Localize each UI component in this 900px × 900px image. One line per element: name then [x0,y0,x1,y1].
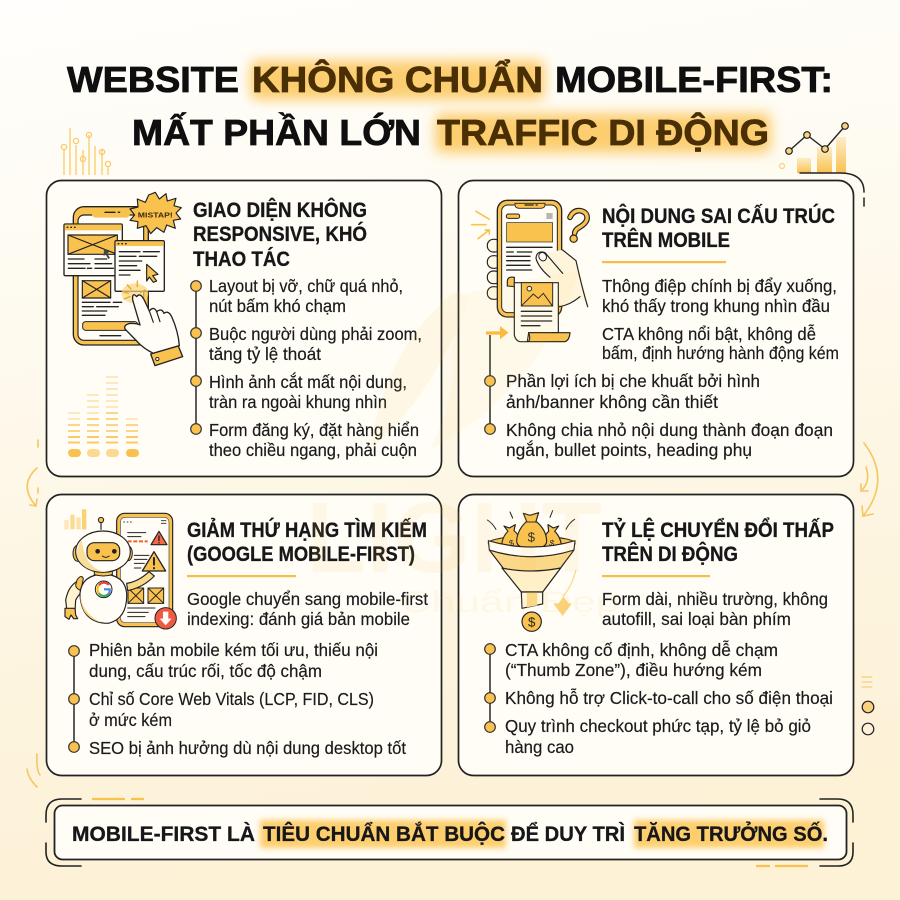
heading: conversion rate [602,518,834,577]
icon: phone with scrolling page [472,200,588,342]
intro text: Form dài, nhiều trường, không [602,589,828,609]
bullet list: CTA không cố định, không dễ chạm [505,639,778,660]
panel: conversion rate [458,494,854,776]
intro text [602,276,839,363]
bullet list: hàng cao [505,737,574,757]
bullet list: ngắn, bullet points, heading phụ [506,439,752,460]
bullet list: nút bấm khó chạm [209,296,346,316]
intro text: Google chuyển sang mobile-first [187,589,428,609]
watermark: LIGHT [306,482,602,594]
bullet list: Hình ảnh cắt mất nội dung, [209,371,407,392]
title: MOBILE-FIRST: [555,59,833,100]
title: WEBSITE [67,59,239,100]
bullet list: tăng tỷ lệ thoát [209,344,321,364]
intro text: autofill, sai loại bàn phím [602,609,791,629]
bullet list [506,371,833,460]
bullet list [209,276,422,460]
intro text: khó thấy trong khung nhìn đầu [602,296,830,316]
icon: money funnel: $ [528,529,536,544]
decoration: top-right rising chart [780,123,864,206]
bullet list [505,639,833,757]
bullet list: Không hỗ trợ Click-to-call cho số điện thoại [505,687,833,708]
bullet list: (“Thumb Zone”), điều hướng kém [505,660,762,680]
conclusion banner: TĂNG TRƯỞNG SỐ. [634,822,828,846]
watermark [306,270,620,619]
intro text: Thông điệp chính bị đẩy xuống, [602,276,837,296]
title: MẤT PHẦN LỚN [132,111,421,153]
timeline bullets [485,335,495,434]
icon: robot with phone [64,509,176,629]
decoration: top-left data lines [61,128,111,175]
heading: responsive: THAO TÁC [193,248,290,271]
intro text: bấm, định hướng hành động kém [602,343,839,363]
panel: search ranking [46,494,442,776]
bullet list: tràn ra ngoài khung nhìn [209,392,387,412]
bullet list [89,640,406,758]
panel: content structure [458,180,854,476]
title [67,58,833,153]
heading: conversion rate: TRÊN DI ĐỘNG [602,542,738,566]
heading: responsive: GIAO DIỆN KHÔNG [193,198,367,222]
bullet list: Phiên bản mobile kém tối ưu, thiếu nội [89,640,378,660]
title: KHÔNG CHUẨN [252,58,543,100]
icon: equalizer bars [68,376,139,457]
bullet list: Form đăng ký, đặt hàng hiển [209,420,419,440]
bullet list: ảnh/banner không cần thiết [506,392,718,412]
heading: content structure: TRÊN MOBILE [602,228,730,252]
icon: phone with broken layout and tapping hand: MISTAP! [138,210,173,219]
heading: search ranking [187,518,427,577]
title: TRAFFIC DI ĐỘNG [437,111,769,153]
icon: money funnel [487,511,576,631]
intro text [602,589,828,629]
conclusion banner: MOBILE-FIRST LÀ [72,823,255,846]
heading: conversion rate: TỶ LỆ CHUYỂN ĐỔI THẤP [602,518,834,542]
heading: content structure [602,204,835,263]
conclusion banner: ĐỂ DUY TRÌ [511,823,625,846]
heading: content structure: NỘI DUNG SAI CẤU TRÚC [602,204,835,228]
panel: responsive interface [46,180,442,476]
decoration: side arrows and dots [27,440,878,787]
bullet list: Layout bị vỡ, chữ quá nhỏ, [209,276,403,296]
bullet list: SEO bị ảnh hưởng dù nội dung desktop tốt [89,738,406,758]
watermark: Chuẩn Đẹp [400,586,620,619]
icon: phone with broken layout and tapping hand [64,192,183,366]
bullet list: ở mức kém [89,710,172,730]
bullet list: Không chia nhỏ nội dung thành đoạn đoạn [506,420,833,440]
bullet list: theo chiều ngang, phải cuộn [209,440,417,460]
bullet list: Chỉ số Core Web Vitals (LCP, FID, CLS) [89,689,374,709]
heading: search ranking: GIẢM THỨ HẠNG TÌM KIẾM [187,518,427,542]
icon: money funnel: $ [549,538,555,548]
icon: money funnel: $ [528,615,536,630]
heading: responsive: RESPONSIVE, KHÓ [193,222,367,246]
bullet list: Quy trình checkout phức tạp, tỷ lệ bỏ giỏ [505,716,811,736]
heading: responsive [193,198,367,271]
bullet list: Phần lợi ích bị che khuất bởi hình [506,371,760,391]
icon: money funnel: $ [508,538,515,548]
timeline bullets [191,281,201,434]
conclusion banner [46,799,853,866]
bullet list: Buộc người dùng phải zoom, [209,324,422,344]
intro text [187,589,428,629]
intro text: indexing: đánh giá bản mobile [187,609,410,629]
timeline bullets [69,646,79,752]
intro text: CTA không nổi bật, không dễ [602,323,816,344]
heading: search ranking: (GOOGLE MOBILE-FIRST) [187,543,415,566]
bullet list: dung, cấu trúc rối, tốc độ chậm [89,661,322,681]
conclusion banner: TIÊU CHUẨN BẮT BUỘC [263,822,505,846]
timeline bullets [485,644,495,732]
